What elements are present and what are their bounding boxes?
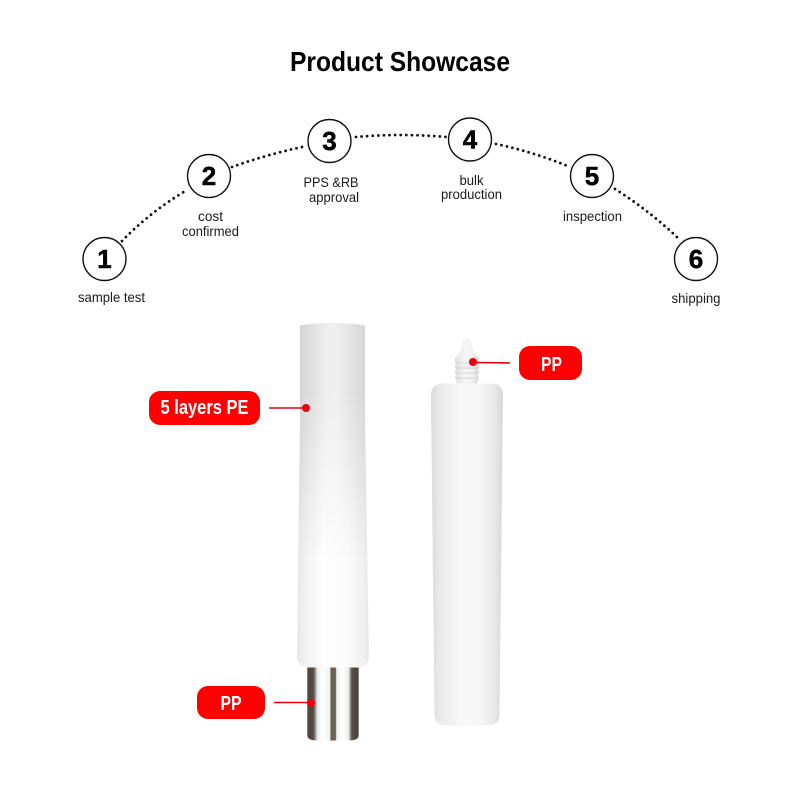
tube body <box>297 323 369 668</box>
dotted connector arc <box>122 135 680 241</box>
step 1: sample test <box>78 238 145 305</box>
step 6: shipping <box>672 238 720 306</box>
step 3: PPS & RB approval: approval <box>309 189 359 205</box>
step 1: sample test: sample test <box>78 289 145 305</box>
step 2: cost confirmed: 2 <box>202 161 216 191</box>
callout: PP nozzle: PP <box>541 354 562 376</box>
callout: PP nozzle <box>469 346 582 380</box>
step 4: bulk production: 4 <box>463 124 478 154</box>
step 4: bulk production: production <box>441 186 502 202</box>
step 4: bulk production: bulk <box>460 172 484 188</box>
step 6: shipping: shipping <box>672 290 720 306</box>
step 2: cost confirmed: cost <box>198 208 223 224</box>
step 5: inspection: 5 <box>585 161 599 191</box>
step 5: inspection: inspection <box>563 208 622 224</box>
callout: 5 layers PE <box>149 391 310 425</box>
callout: 5 layers PE: 5 layers PE <box>160 397 248 419</box>
step 1: sample test: 1 <box>97 244 112 274</box>
callout: PP cap <box>197 686 315 719</box>
title: Product Showcase <box>290 46 510 77</box>
product: tube with chrome cap <box>297 323 369 740</box>
step 5: inspection <box>563 154 622 224</box>
step 4: bulk production <box>441 118 502 202</box>
callout: PP cap: PP <box>220 693 242 715</box>
step 3: PPS & RB approval: 3 <box>322 126 337 156</box>
step 2: cost confirmed: confirmed <box>182 223 239 239</box>
nozzle tip and threads <box>454 338 480 384</box>
chrome cap <box>307 666 359 740</box>
step 2: cost confirmed <box>182 154 239 239</box>
product: tube with nozzle <box>431 338 503 726</box>
tube body <box>431 384 503 726</box>
step 6: shipping: 6 <box>689 244 703 274</box>
step 3: PPS & RB approval: PPS &RB <box>304 174 358 190</box>
process timeline <box>78 118 720 306</box>
step 3: PPS & RB approval <box>304 120 359 205</box>
